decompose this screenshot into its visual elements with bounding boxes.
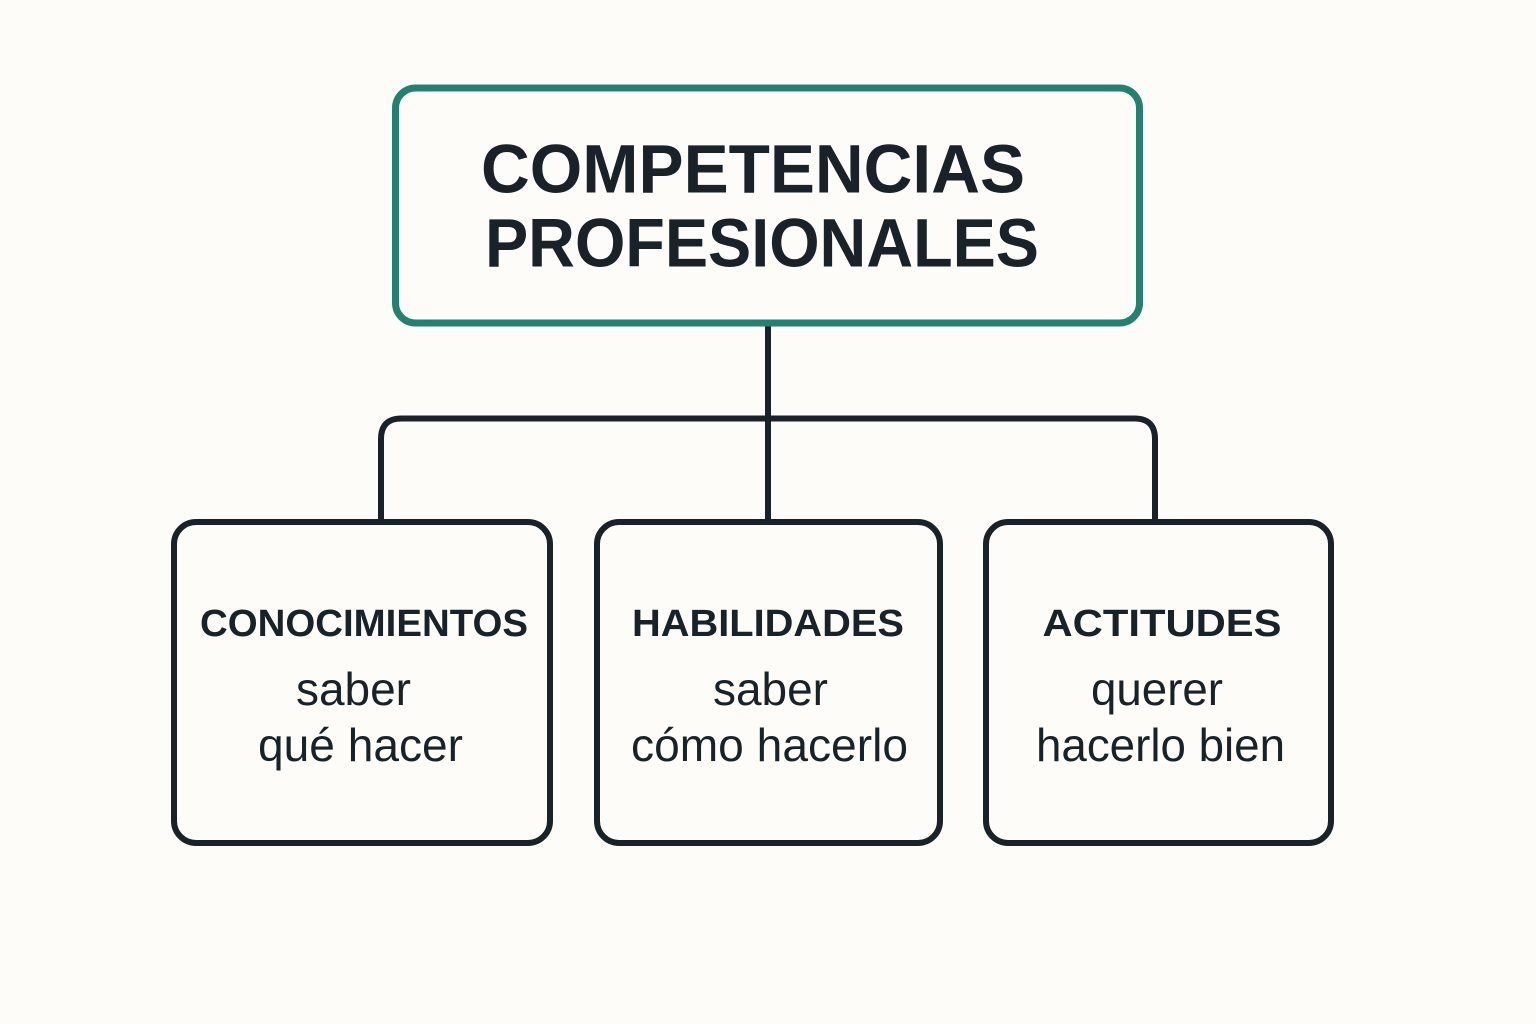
panel: actitudes bbox=[986, 522, 1331, 843]
text: querer hacerlo bien: hacerlo bien bbox=[1036, 719, 1285, 771]
text: saber cómo hacerlo: saber bbox=[713, 663, 828, 715]
panel: conocimientos bbox=[174, 522, 550, 843]
heading: conocimientos: CONOCIMIENTOS bbox=[200, 603, 528, 645]
heading: actitudes: ACTITUDES bbox=[1042, 603, 1282, 645]
title box bbox=[396, 88, 1140, 323]
text: saber qué hacer: qué hacer bbox=[258, 719, 463, 771]
panel: habilidades bbox=[597, 522, 940, 843]
text: saber cómo hacerlo: cómo hacerlo bbox=[631, 719, 908, 771]
text: querer hacerlo bien: querer bbox=[1091, 663, 1223, 715]
title text: COMPETENCIAS bbox=[481, 130, 1025, 208]
heading: habilidades: HABILIDADES bbox=[632, 603, 904, 645]
text: saber qué hacer: saber bbox=[296, 663, 411, 715]
title text: PROFESIONALES bbox=[485, 204, 1039, 282]
connector lines bbox=[381, 325, 1155, 521]
